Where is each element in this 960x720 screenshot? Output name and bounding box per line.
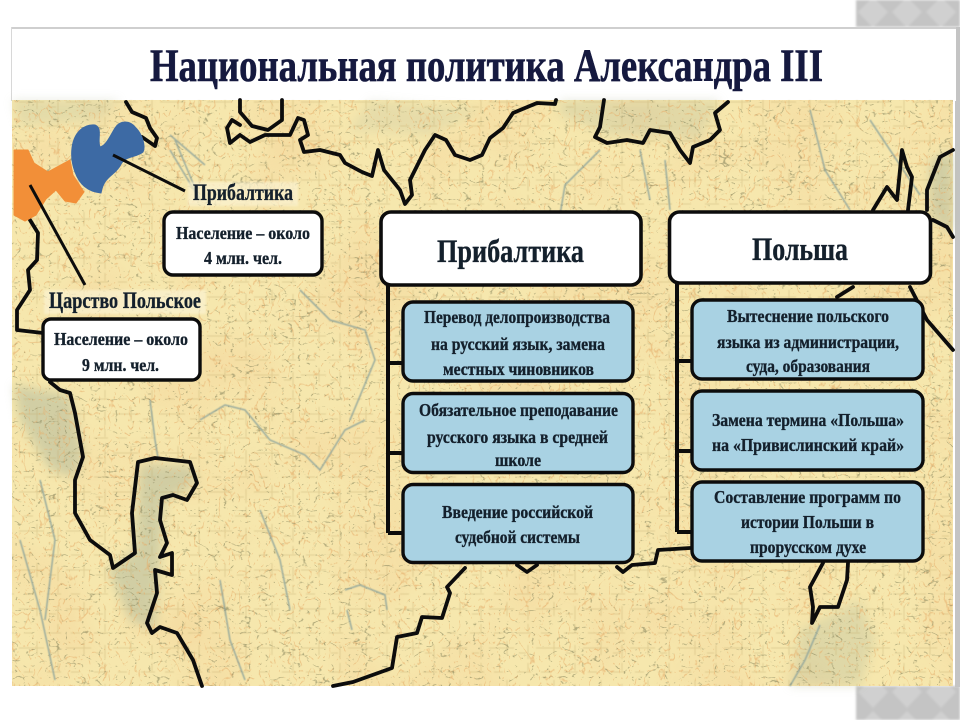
right edge strip (955, 27, 960, 687)
western border (17, 220, 43, 333)
map terrain patches (12, 100, 953, 686)
Poland measure 1: Вытеснение польского (727, 306, 889, 326)
population box: Poland: 9 млн. чел. (82, 355, 159, 375)
Baltic measure 2: русского языка в средней (427, 427, 608, 447)
Baltic measure 1: Перевод делопроизводства (424, 307, 610, 327)
borders (17, 100, 953, 686)
connector: Baltic column (388, 284, 403, 533)
pointer line to Царство Польское (30, 185, 85, 285)
column header: Прибалтика: Прибалтика (437, 234, 584, 270)
Poland measure 3: истории Польши в (741, 512, 874, 532)
population box: Poland: Население – около (54, 329, 188, 349)
population box: Baltic: Население – около (176, 223, 310, 243)
population box: Poland (43, 319, 200, 380)
south-eastern frontier (333, 568, 465, 686)
column header: Польша: Польша (752, 232, 848, 268)
Poland measure 2 (692, 391, 923, 470)
Poland measure 1 (692, 300, 923, 379)
connector: Poland column (677, 282, 692, 532)
population box: Baltic: 4 млн. чел. (204, 248, 282, 268)
Poland measure 1: суда, образования (746, 356, 870, 376)
Poland measure 1: языка из администрации, (717, 332, 899, 352)
population box: Baltic (164, 212, 322, 275)
column header: Прибалтика (381, 212, 641, 285)
northern border: east (595, 100, 728, 163)
corner pattern: bottom right (856, 686, 960, 720)
island outline (810, 563, 848, 623)
pointer line to Прибалтика (113, 155, 185, 191)
northern border: west coast (126, 102, 157, 146)
Baltic measure 3: Введение российской (442, 502, 593, 522)
map rivers (20, 110, 920, 686)
Poland measure 3: Составление программ по (714, 487, 901, 507)
Poland measure 3: прорусском духе (750, 537, 866, 557)
map background (12, 100, 953, 686)
Poland measure 2: на «Привислинский край» (712, 435, 904, 455)
map label: Прибалтика: Прибалтика (193, 180, 293, 205)
map label: Царство Польское: Царство Польское (49, 288, 201, 313)
Baltic measure 1: на русский язык, замена (431, 334, 605, 354)
southern frontier (50, 382, 202, 686)
title band (11, 27, 956, 101)
Baltic measure 1 (403, 302, 633, 381)
Baltic measure 3: судебной системы (455, 527, 580, 547)
eastern border (837, 150, 953, 350)
Baltic measure 2: Обязательное преподавание (419, 400, 618, 420)
column header: Польша (670, 212, 930, 283)
Poland measure 2: Замена термина «Польша» (712, 410, 904, 430)
Baltic region: blue (72, 122, 144, 193)
northern border: central (227, 100, 556, 204)
Baltic measure 2: школе (495, 450, 541, 470)
Polish kingdom: orange (14, 150, 84, 221)
corner pattern: top right (856, 0, 960, 27)
Baltic measure 2 (403, 394, 633, 472)
Poland measure 3 (692, 482, 923, 561)
Baltic measure 3 (403, 484, 633, 562)
Baltic measure 1: местных чиновников (443, 359, 594, 379)
